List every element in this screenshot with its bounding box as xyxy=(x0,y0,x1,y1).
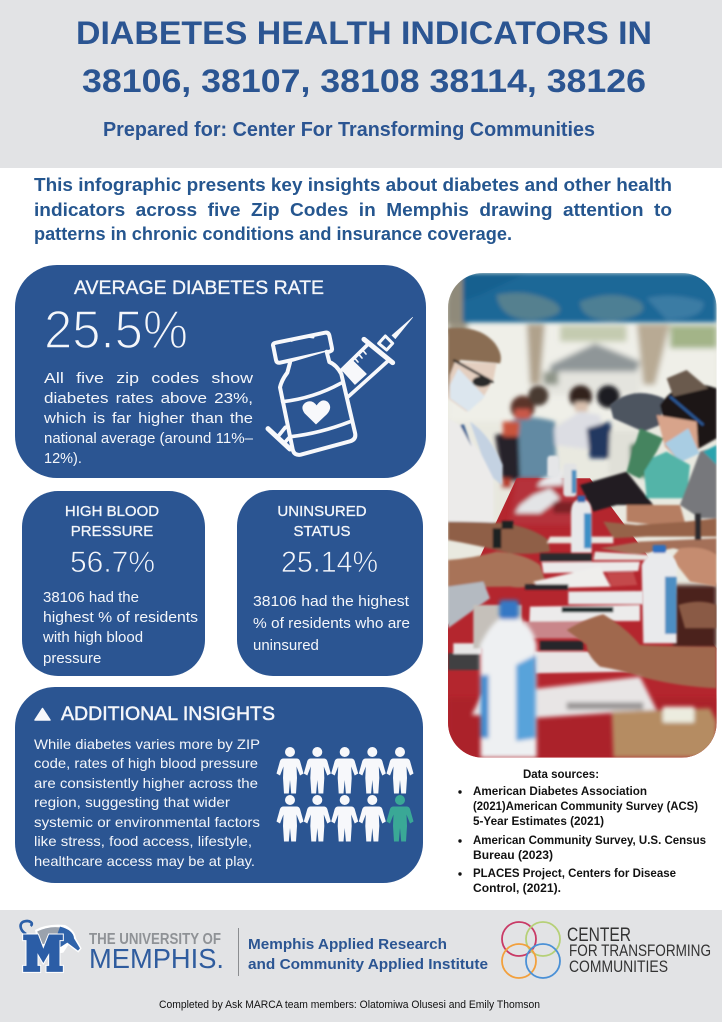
table xyxy=(448,478,717,758)
source list xyxy=(458,786,706,895)
panel heading: UNINSURED xyxy=(277,503,367,520)
body text: with high blood xyxy=(42,629,143,646)
source list: American Community Survey, U.S. Census xyxy=(473,835,706,847)
panel: additional insights xyxy=(15,687,423,883)
institute name: Memphis Applied Research xyxy=(248,936,447,953)
body text: pressure xyxy=(43,650,101,667)
body text xyxy=(253,593,410,654)
subtitle: Prepared for: Center For Transforming Communities xyxy=(103,119,595,141)
forearm foreground xyxy=(567,614,717,688)
intro text: This infographic presents key insights about diabetes and other health xyxy=(34,174,672,195)
panel heading: HIGH BLOOD xyxy=(65,503,159,520)
data sources: Data sources: xyxy=(523,769,599,781)
source list: Bureau (2023) xyxy=(473,850,553,862)
credit line: Completed by Ask MARCA team members: Olatomiwa Olusesi and Emily Thomson xyxy=(159,999,540,1011)
body text xyxy=(34,736,260,869)
source list: American Diabetes Association xyxy=(473,786,647,798)
panel heading: AVERAGE DIABETES RATE xyxy=(74,278,324,299)
icon: ten people, one highlighted xyxy=(276,747,414,842)
seated people at right xyxy=(580,370,717,628)
source list: Control, (2021). xyxy=(473,883,561,895)
panel heading: STATUS xyxy=(294,523,350,540)
canopy xyxy=(448,273,717,323)
body text: region, suggesting that wider xyxy=(34,794,230,810)
nurse in white coat xyxy=(448,328,550,628)
body text: code, rates of high blood pressure xyxy=(34,755,258,771)
body text: national average (around 11%– xyxy=(44,431,254,447)
title: DIABETES HEALTH INDICATORS IN xyxy=(76,15,652,51)
body text: highest % of residents xyxy=(43,609,198,626)
body text xyxy=(42,589,198,667)
crowd, background xyxy=(492,382,646,492)
panel heading xyxy=(277,503,367,540)
header band xyxy=(0,0,722,168)
logo: Center for Transforming Communities: COMMUNITIES xyxy=(569,957,668,976)
body text: like stress, food access, lifestyle, xyxy=(34,833,252,849)
body text: While diabetes varies more by ZIP xyxy=(34,736,260,752)
data sources xyxy=(458,769,706,895)
panel heading: ADDITIONAL INSIGHTS xyxy=(61,704,275,725)
institute name: and Community Applied Institute xyxy=(248,956,488,973)
body text: 38106 had the highest xyxy=(253,593,410,610)
photo: community health screening table xyxy=(448,273,717,758)
body text: healthcare access may be at play. xyxy=(34,853,255,869)
intro text: patterns in chronic conditions and insurance coverage. xyxy=(34,223,512,244)
logo: Center for Transforming Communities xyxy=(502,922,711,978)
panel: high blood pressure xyxy=(22,491,205,676)
body text: diabetes rates above 23%, xyxy=(44,391,253,407)
title: 38106, 38107, 38108 38114, 38126 xyxy=(82,63,646,99)
logo: University of Memphis: THE UNIVERSITY OF xyxy=(89,931,221,948)
logo: University of Memphis: MEMPHIS. xyxy=(89,943,224,974)
logo: University of Memphis xyxy=(21,921,224,974)
source list: 5-Year Estimates (2021) xyxy=(473,816,604,828)
papers, foreground xyxy=(472,677,717,758)
source list: PLACES Project, Centers for Disease xyxy=(473,868,676,880)
panel heading: PRESSURE xyxy=(71,523,153,540)
papers and pens on table xyxy=(448,537,650,673)
footer band xyxy=(0,910,722,1022)
body text: 12%). xyxy=(44,451,82,467)
body text: systemic or environmental factors xyxy=(34,814,260,830)
intro text: indicators across five Zip Codes in Memphis drawing attention to xyxy=(34,199,672,220)
body text: 38106 had the xyxy=(43,589,139,606)
mid bottles xyxy=(547,456,677,643)
big number: 25.14% xyxy=(281,546,378,579)
tiger mascot with block M xyxy=(21,921,82,972)
icon: warning triangle xyxy=(35,708,50,720)
big number: 25.5% xyxy=(44,300,188,360)
body text: All five zip codes show xyxy=(44,371,254,387)
body text: uninsured xyxy=(253,637,319,654)
panel heading xyxy=(65,503,159,540)
intro text xyxy=(34,174,672,244)
icon: vial and syringe xyxy=(268,317,413,455)
title xyxy=(76,15,652,99)
body text xyxy=(43,371,254,467)
near bottle xyxy=(480,600,537,758)
source list: (2021)American Community Survey (ACS) xyxy=(473,801,698,813)
body text: are consistently higher across the xyxy=(34,775,258,791)
big number: 56.7% xyxy=(70,546,155,579)
body text: which is far higher than the xyxy=(43,411,253,427)
panel: uninsured status xyxy=(237,490,423,676)
panel: average diabetes rate xyxy=(15,265,426,478)
logo: Center for Transforming Communities: CENTER xyxy=(567,925,631,946)
institute name xyxy=(248,936,488,973)
body text: % of residents who are xyxy=(253,615,410,632)
